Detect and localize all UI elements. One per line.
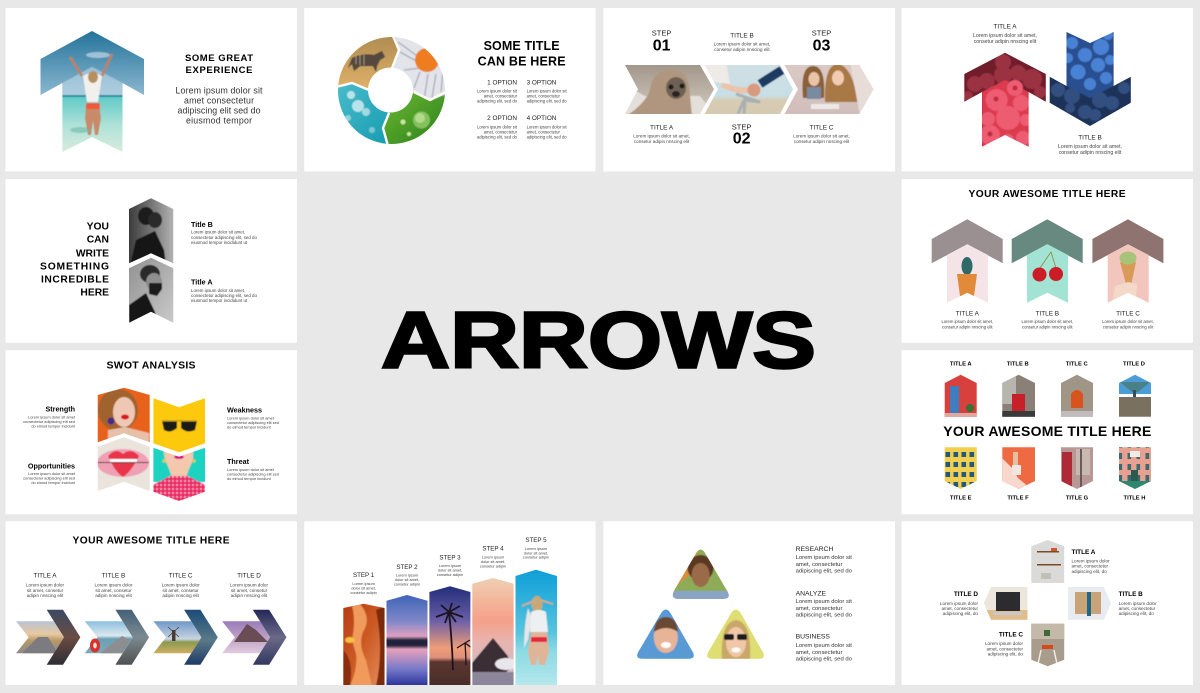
labels — [26, 572, 268, 598]
top labels: TITLE B — [1007, 361, 1029, 367]
labels: STEP 5 — [525, 537, 547, 544]
labels: consetur adipin nnscing elit — [1103, 324, 1154, 330]
options text: amet, consectetur — [484, 130, 518, 134]
photo: opportunities lips — [97, 437, 151, 493]
labels: consetur adipin nnscing elit — [974, 39, 1037, 45]
tile: chair — [1031, 623, 1065, 667]
labels: amet, consectetur — [1119, 606, 1156, 611]
labels: adipiscing elit, do — [1119, 611, 1154, 616]
labels: Lorem ipsum dolor — [162, 582, 200, 588]
labels: adipin nnscing elit — [231, 593, 268, 598]
labels: Lorem ipsum — [482, 554, 504, 560]
labels: Title B — [191, 220, 213, 229]
labels: TITLE B — [1036, 310, 1059, 318]
labels: TITLE B — [102, 572, 125, 580]
labels — [350, 537, 549, 595]
labels — [191, 220, 257, 303]
labels: adipiscing elit, do — [988, 652, 1023, 656]
labels: consectetur adipiscing elit sed — [227, 420, 279, 425]
labels: STEP — [732, 122, 751, 132]
heading: SOME GREAT — [185, 53, 253, 64]
labels: eiusmod tempor incididunt ut — [191, 240, 248, 245]
text block: Lorem ipsum dolor sit — [176, 86, 263, 96]
labels: consetur adipin — [394, 582, 420, 586]
text column: amet, consectetur — [796, 650, 842, 656]
chevron photo: two girls — [784, 65, 874, 114]
chevron photo: holding hands — [704, 65, 793, 114]
labels: consetur adipin — [437, 572, 463, 577]
labels: Lorem ipsum — [525, 546, 547, 551]
labels: Lorem ipsum dolor sit amet, — [1102, 319, 1154, 324]
labels: Lorem ipsum dolor sit amet, — [941, 319, 993, 324]
labels — [973, 24, 1122, 156]
labels — [940, 549, 1157, 656]
labels: Lorem ipsum dolor sit amet, — [633, 134, 690, 138]
labels: TITLE A — [1072, 549, 1096, 556]
labels: consetur adipin — [480, 564, 506, 568]
labels: dolor sit amet, — [481, 559, 505, 564]
options text: Lorem ipsum dolor sit — [527, 88, 567, 94]
heading: EXPERIENCE — [186, 65, 252, 76]
tile: shelter — [1118, 374, 1152, 417]
arrow: windmill — [153, 610, 218, 665]
heading: INCREDIBLE — [41, 274, 109, 286]
labels: consetur adipin nnscing elit — [942, 324, 993, 330]
top labels — [950, 361, 1145, 367]
labels: TITLE C — [169, 572, 193, 580]
column 3: palm tree at dusk — [428, 585, 472, 686]
photo: threat woman on teal — [153, 447, 206, 503]
column 2: lake sunset — [385, 594, 429, 686]
tile: red tram — [1002, 374, 1036, 417]
options text: adipiscing elit, sed do — [527, 134, 567, 140]
heading: WRITE — [76, 248, 109, 260]
labels: adipiscing elit, do — [1072, 569, 1107, 574]
labels: do eimod tempor incidunt — [31, 480, 76, 485]
labels: Lorem ipsum dolor — [1119, 601, 1157, 606]
bottom labels: TITLE E — [950, 496, 972, 502]
options text: 2 OPTION — [487, 115, 517, 122]
heading: CAN BE HERE — [478, 54, 566, 68]
heading: SWOT ANALYSIS — [106, 360, 196, 372]
options text: Lorem ipsum dolor sit — [477, 88, 518, 94]
labels: Title A — [191, 278, 213, 286]
labels: Lorem ipsum dolor — [940, 601, 978, 606]
labels — [23, 404, 279, 485]
text column: amet, consectetur — [796, 562, 842, 568]
labels: dolor sit amet, — [438, 568, 462, 572]
triangle portrait: woman — [670, 545, 732, 600]
labels: consectetur adipiscing elit sed — [23, 419, 75, 424]
labels: consetur adipin nnscing elit — [714, 47, 770, 52]
labels: sit amet, consetur — [162, 588, 199, 593]
heading: YOUR AWESOME TITLE HERE — [943, 423, 1151, 439]
labels: amet, consectetur — [986, 646, 1023, 652]
options text: adipiscing elit, sed do — [477, 134, 518, 140]
labels: amet, consectetur — [1072, 564, 1108, 568]
options text: adipiscing elit, sed do — [477, 98, 518, 104]
labels: Lorem ipsum — [396, 572, 418, 578]
labels — [633, 28, 850, 148]
main title: ARROWS — [381, 296, 816, 384]
text column: BUSINESS — [796, 634, 830, 640]
panel: some great experience — [6, 8, 297, 172]
options text: 4 OPTION — [527, 115, 557, 122]
photo: weakness sunglasses on yellow — [153, 398, 206, 454]
labels: Lorem ipsum — [439, 563, 461, 568]
labels: Lorem ipsum dolor — [985, 641, 1023, 646]
labels: STEP 1 — [353, 572, 375, 579]
panel: three steps chevrons — [603, 8, 895, 172]
labels: Lorem ipsum dolor sit amet, — [793, 134, 850, 138]
labels: adipin nnscing elit — [162, 593, 200, 598]
heading: SOME TITLE — [484, 39, 560, 53]
tile: red house — [944, 374, 978, 417]
panel: four direction tiles — [902, 521, 1193, 685]
labels: TITLE A — [993, 24, 1017, 30]
arrow: boardwalk — [85, 610, 149, 665]
labels: adipiscing elit, do — [943, 611, 978, 616]
labels: STEP 4 — [482, 546, 504, 552]
labels: do eimod tempor incidunt — [227, 476, 272, 481]
labels: TITLE D — [954, 591, 978, 598]
heading: CAN — [87, 234, 109, 246]
tile: laptop — [983, 587, 1028, 620]
labels: Lorem ipsum dolor sit amet, — [1058, 144, 1122, 150]
arrow B: cherries — [1012, 219, 1083, 305]
text column: amet, consectetur — [796, 606, 842, 612]
top labels: TITLE C — [1066, 361, 1088, 367]
labels: consetur adipin nnscing elit — [1059, 150, 1122, 156]
options text: Lorem ipsum dolor sit — [477, 124, 518, 130]
labels: TITLE A — [956, 310, 980, 318]
top labels: TITLE D — [1123, 361, 1145, 367]
text block: adipiscing elit sed do — [178, 106, 261, 116]
options text — [477, 80, 567, 140]
text column: adipiscing elit, sed do — [796, 656, 853, 662]
triangle portrait: blonde woman — [703, 604, 768, 659]
text column: adipiscing elit, sed do — [796, 613, 853, 619]
labels: TITLE B — [1119, 591, 1143, 598]
panel: three pastel arrows — [902, 179, 1193, 343]
top labels: TITLE A — [950, 361, 972, 367]
panel: swot analysis — [6, 350, 297, 514]
labels: TITLE C — [810, 124, 834, 132]
labels: TITLE C — [999, 632, 1023, 638]
labels: Threat — [227, 457, 250, 466]
labels: Lorem ipsum — [352, 581, 375, 586]
heading — [478, 39, 566, 68]
arrow photo: man looking up — [128, 197, 174, 265]
tile: red facade — [1060, 447, 1094, 490]
labels: Lorem ipsum dolor sit amet, — [714, 42, 770, 46]
labels: Lorem ipsum dolor sit amet — [227, 467, 275, 472]
bottom labels: TITLE G — [1066, 496, 1089, 502]
labels: 02 — [733, 130, 751, 148]
labels: Lorem ipsum dolor sit amet, — [973, 33, 1037, 39]
panel: five rising steps — [304, 521, 596, 686]
labels: TITLE D — [237, 572, 261, 580]
labels: consetur adipin nnscing elit — [1022, 324, 1073, 330]
arrow: blueberries down — [1050, 32, 1131, 126]
labels: consectetur adipiscing elit sed — [23, 476, 75, 480]
text column: Lorem ipsum dolor sit — [796, 555, 852, 561]
labels: sit amet, consetur — [231, 588, 268, 593]
heading: YOUR AWESOME TITLE HERE — [968, 189, 1126, 200]
heading — [40, 222, 109, 298]
text block: eiusmod tempor — [186, 116, 252, 126]
arrow A: cactus — [932, 219, 1003, 305]
labels: do eimod tempor incidunt — [31, 424, 76, 428]
labels: dolor sit amet, — [524, 550, 548, 556]
panel: ring with options — [304, 8, 596, 172]
text column: Lorem ipsum dolor sit — [796, 643, 852, 649]
arrow: road — [16, 610, 80, 665]
labels: TITLE B — [1078, 134, 1102, 142]
labels: consetur adipin — [523, 554, 549, 560]
labels: dolor sit amet, — [351, 586, 376, 590]
tile: orange stairs — [1002, 447, 1036, 490]
labels: Lorem ipsum dolor — [1072, 558, 1110, 564]
heading: YOU — [87, 222, 109, 232]
options text: 3 OPTION — [527, 80, 557, 86]
labels: Lorem ipsum dolor sit amet, — [191, 288, 245, 293]
labels: Lorem ipsum dolor — [94, 582, 133, 588]
labels: Lorem ipsum dolor sit amet — [28, 414, 76, 420]
labels: eiusmod tempor incididunt ut — [191, 298, 248, 303]
tile: book — [1068, 587, 1112, 620]
arrow photo: man in profile — [128, 256, 174, 324]
labels: Strength — [45, 404, 75, 414]
labels: sit amet, consetur — [27, 588, 64, 593]
column 1: canyon — [342, 602, 386, 686]
labels: TITLE B — [730, 32, 754, 40]
column 4: mountain peak — [472, 578, 514, 685]
heading — [185, 53, 253, 76]
column 5: woman in sea — [514, 568, 558, 686]
labels: TITLE A — [33, 572, 57, 580]
labels: TITLE A — [650, 124, 674, 132]
tile: yellow building — [944, 447, 978, 490]
labels: consectetur adipiscing elit, sed do — [191, 293, 257, 298]
labels: Weakness — [227, 406, 262, 414]
text column: RESEARCH — [796, 546, 833, 553]
tile: shelves — [1031, 540, 1065, 584]
chevron photo: pug — [625, 65, 714, 114]
bottom labels: TITLE H — [1124, 496, 1145, 502]
text column: adipiscing elit, sed do — [796, 569, 853, 575]
labels: STEP — [652, 28, 671, 38]
labels: Opportunities — [28, 462, 75, 470]
heading: SOMETHING — [40, 262, 109, 272]
labels: STEP — [812, 28, 831, 38]
options text: adipiscing elit, sed do — [527, 98, 567, 104]
heading: HERE — [80, 288, 109, 298]
arrow: raspberries up — [964, 52, 1046, 147]
labels: Lorem ipsum dolor sit amet, — [191, 230, 245, 234]
labels: adipin nnscing elit — [27, 593, 64, 598]
panel: eight architecture tiles — [902, 350, 1193, 514]
arrow: mountains — [222, 610, 286, 665]
ring of four photo segments — [338, 37, 445, 144]
text column — [796, 546, 853, 662]
panel: triangle portraits — [603, 521, 895, 685]
heading: YOUR AWESOME TITLE HERE — [72, 536, 230, 546]
triangle portrait: smiling man — [633, 604, 698, 659]
labels: Lorem ipsum dolor sit amet — [227, 416, 275, 420]
bottom labels: TITLE F — [1007, 496, 1029, 502]
panel: up and down berry arrows — [902, 8, 1193, 172]
labels: consetur adipin — [350, 590, 377, 595]
options text: amet, consectetur — [527, 130, 560, 134]
labels: sit amet, consetur — [95, 588, 132, 593]
labels: consetur adipin nnscing elit — [634, 139, 690, 144]
bottom labels — [950, 496, 1145, 502]
labels — [941, 310, 1154, 330]
icon: zebra — [348, 51, 385, 72]
tile: stone door — [1060, 374, 1094, 417]
text column: Lorem ipsum dolor sit — [796, 599, 852, 605]
tile: venetian house — [1118, 447, 1152, 490]
labels: STEP 2 — [396, 564, 418, 571]
arrow photo: woman on beach — [38, 28, 147, 155]
panel: four landscape arrows — [6, 521, 297, 685]
labels: consetur adipin nnscing elit — [794, 139, 850, 144]
labels: consectetur adipiscing elit, sed do — [191, 235, 257, 240]
text block — [176, 86, 263, 126]
labels: Lorem ipsum dolor — [26, 582, 64, 588]
labels: Lorem ipsum dolor — [230, 582, 268, 588]
labels: amet, consectetur — [941, 606, 978, 611]
labels: dolor sit amet, — [395, 577, 419, 582]
options text: amet, consectetur — [527, 94, 560, 98]
options text: Lorem ipsum dolor sit — [527, 124, 567, 130]
photo: strength woman on orange — [97, 387, 151, 443]
labels: 03 — [813, 38, 830, 54]
labels: TITLE C — [1116, 310, 1140, 318]
labels: do eimod tempor incidunt — [227, 424, 272, 430]
text column: ANALYZE — [796, 590, 827, 598]
labels: STEP 3 — [439, 554, 461, 562]
labels: adipin nnscing elit — [95, 593, 132, 598]
options text: 1 OPTION — [487, 80, 517, 86]
labels: Lorem ipsum dolor sit amet, — [1021, 319, 1073, 324]
text block: amet consectetur — [184, 96, 254, 106]
labels: consectetur adipiscing elit sed — [227, 472, 279, 476]
options text: amet, consectetur — [484, 94, 518, 98]
panel: you can write something — [6, 179, 297, 343]
arrow C: ice cream — [1092, 219, 1163, 305]
labels: 01 — [653, 38, 671, 54]
labels: Lorem ipsum dolor sit amet — [28, 471, 76, 476]
